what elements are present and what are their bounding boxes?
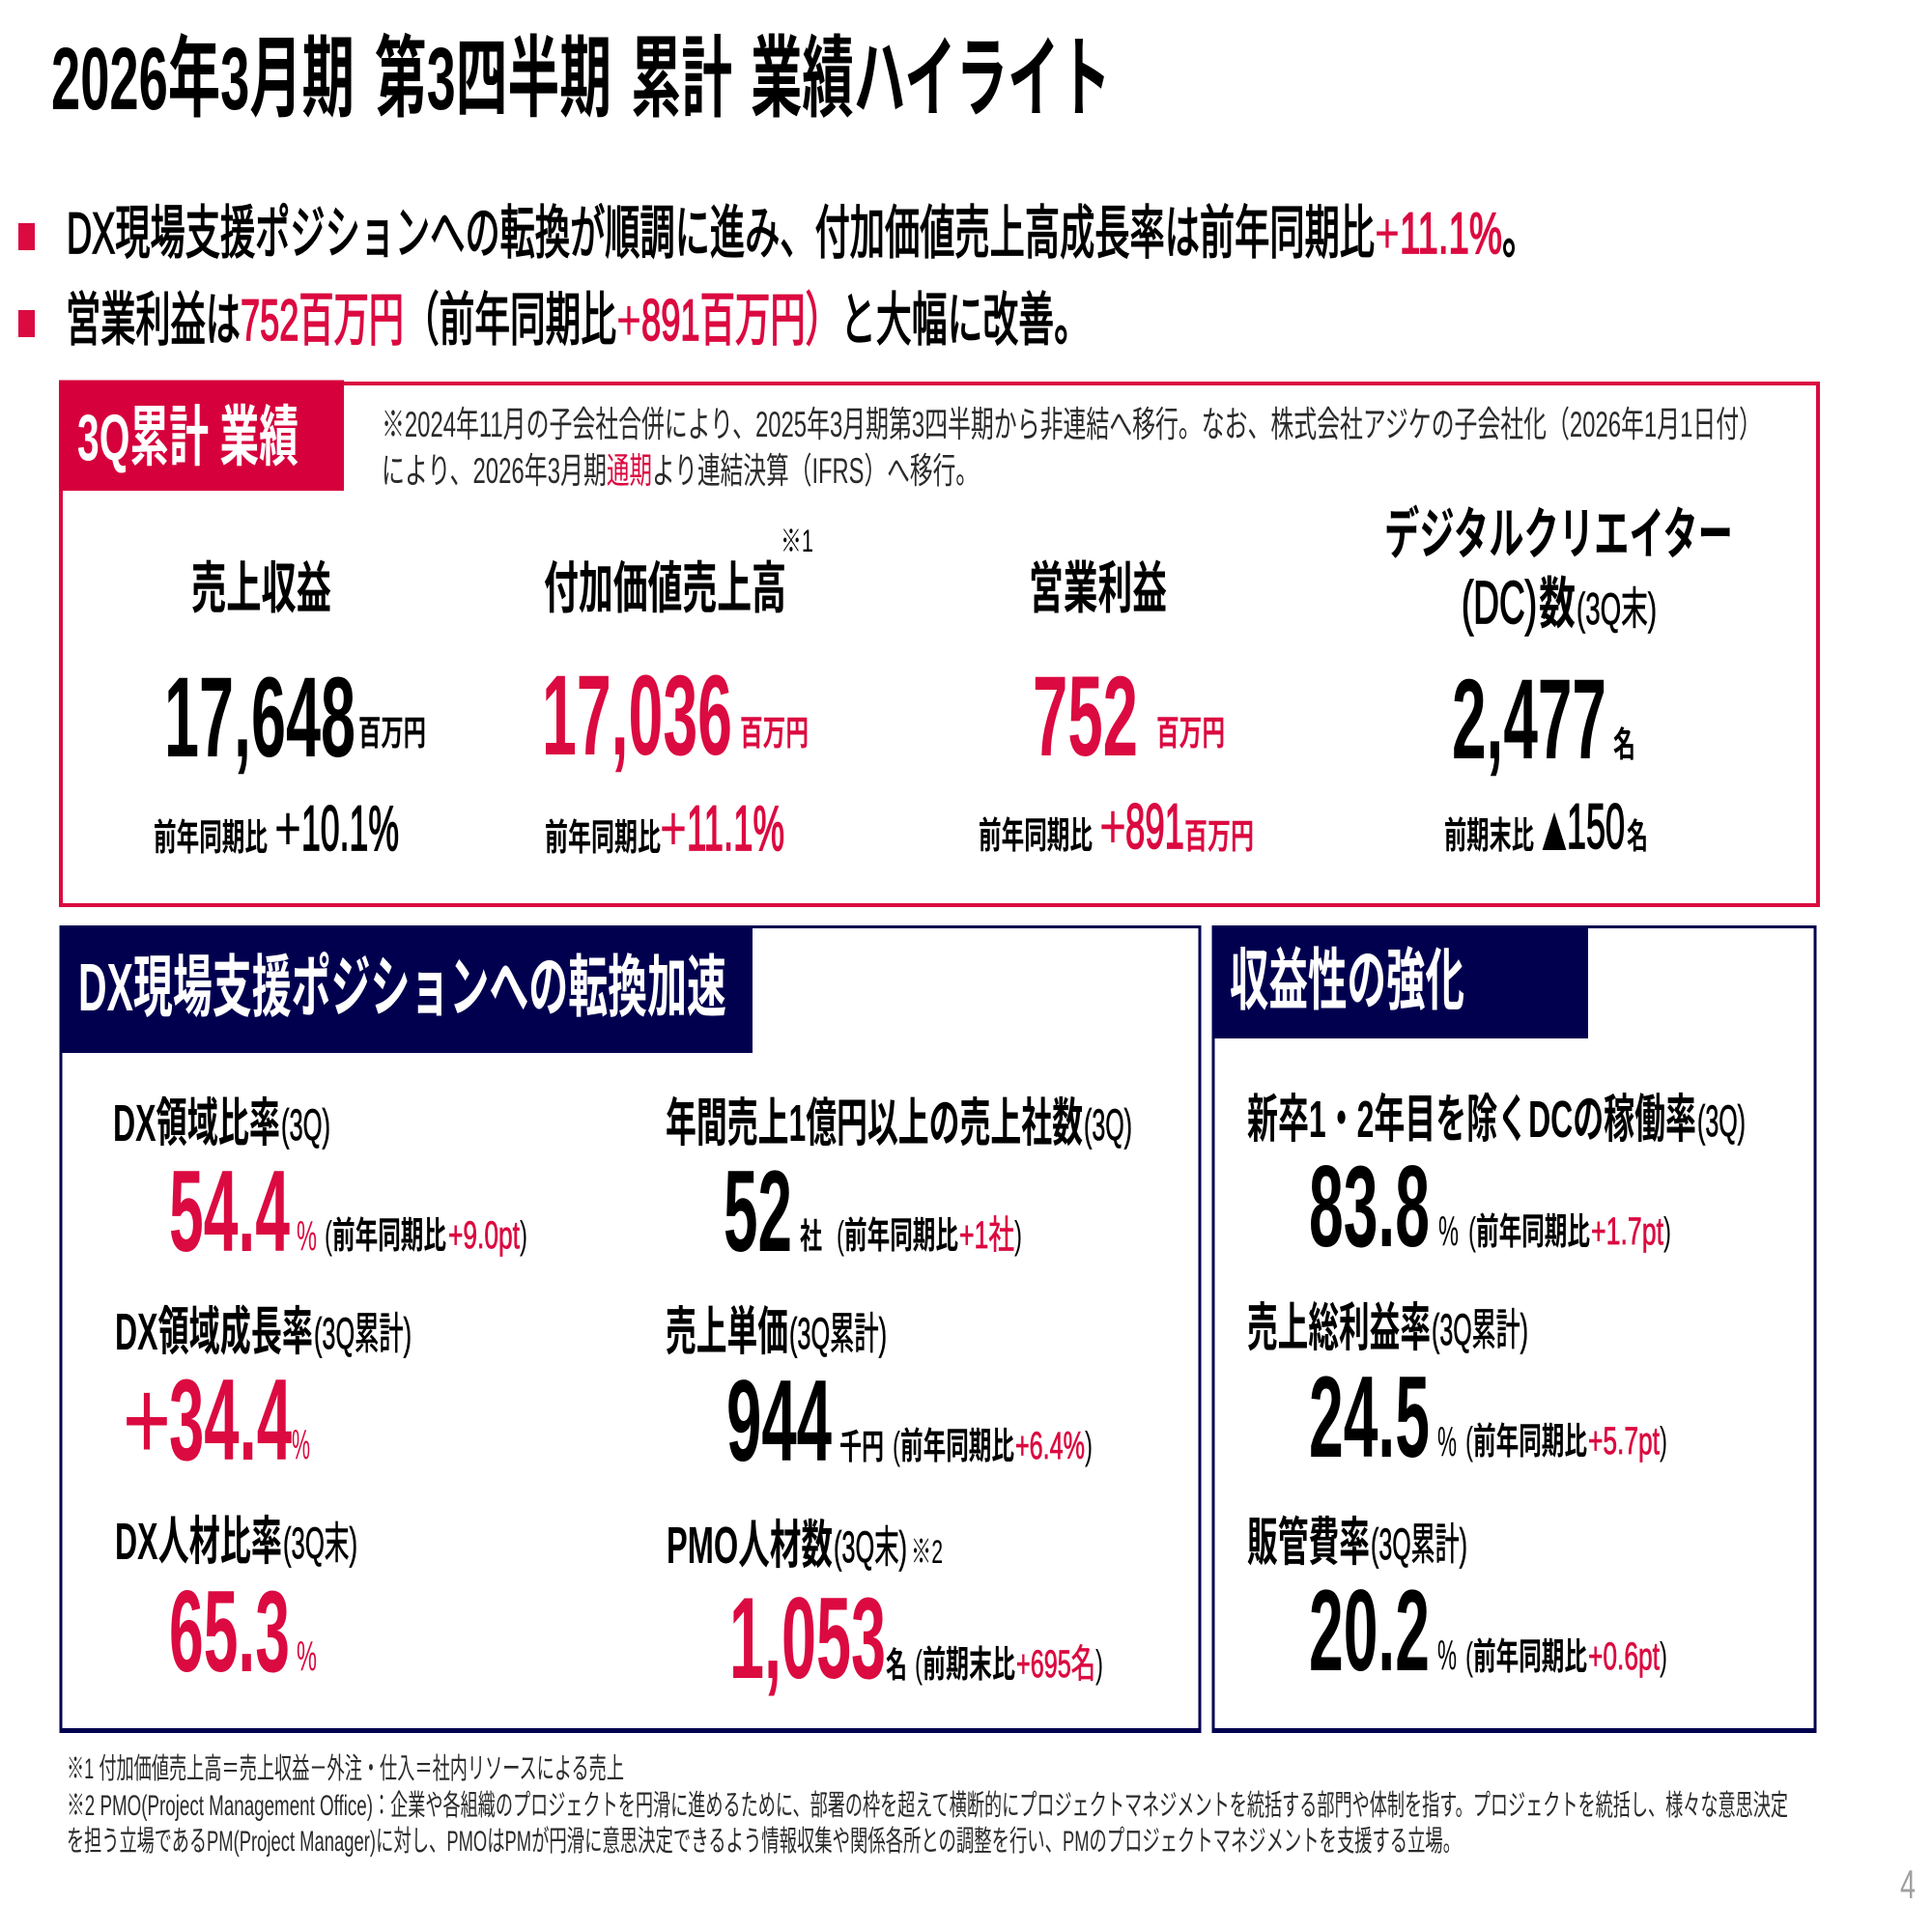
KPI: value-added revenue: ※1 bbox=[781, 524, 813, 558]
bullet marker 2 bbox=[18, 310, 35, 337]
metric: unit price: 944 bbox=[726, 1356, 832, 1486]
metric: DX area growth bbox=[115, 1303, 412, 1485]
metric: clients over 100M yen: 前年同期比 bbox=[844, 1216, 958, 1257]
bullet 2 text: 752百万円 bbox=[241, 288, 404, 353]
footnotes: ※1 付加価値売上高＝売上収益－外注・仕入＝社内リソースによる売上 bbox=[67, 1753, 624, 1785]
KPI: revenue: + bbox=[274, 792, 301, 864]
metric: unit price bbox=[666, 1303, 1093, 1486]
footnotes bbox=[67, 1753, 1788, 1858]
bullet 2 text: （前年同期比 bbox=[404, 288, 616, 353]
bullet 2 text: と大幅に改善。 bbox=[840, 288, 1090, 353]
KPI: value-added revenue bbox=[542, 524, 813, 864]
KPI: digital creators: ▲ bbox=[1534, 792, 1575, 865]
metric: gross margin: ) bbox=[1660, 1420, 1667, 1463]
metric: utilization: % bbox=[1438, 1208, 1459, 1255]
KPI: digital creators: 150 bbox=[1567, 790, 1625, 862]
metric: unit price: 売上単価 bbox=[666, 1303, 788, 1361]
metric: clients over 100M yen: 年間売上1億円以上の売上社数 bbox=[666, 1094, 1083, 1152]
panel bottom edge bbox=[60, 1728, 1202, 1733]
metric: PMO talent: PMO人材数 bbox=[667, 1517, 833, 1575]
KPI: revenue: 百万円 bbox=[358, 713, 426, 753]
KPI: operating profit: 前年同期比 bbox=[979, 816, 1093, 857]
KPI: revenue: 17,648 bbox=[164, 654, 355, 781]
metric: utilization bbox=[1247, 1091, 1746, 1271]
metric: PMO talent bbox=[667, 1517, 1103, 1703]
metric: PMO talent: 1,053 bbox=[729, 1574, 886, 1703]
metric: PMO talent: 前期末比 bbox=[923, 1645, 1015, 1686]
KPI: operating profit bbox=[979, 557, 1254, 862]
metric: utilization: 前年同期比 bbox=[1476, 1212, 1590, 1253]
metric: gross margin: +5.7pt bbox=[1588, 1420, 1660, 1463]
bullet 2 text bbox=[66, 288, 1090, 353]
panel tab bbox=[59, 381, 344, 491]
panel frame bbox=[1213, 927, 1815, 1731]
panel: DX position shift bbox=[60, 925, 1202, 1733]
footnotes: を担う立場である bbox=[67, 1826, 207, 1858]
metric: DX talent ratio: (3Q末) bbox=[283, 1519, 357, 1568]
KPI: digital creators: 前期末比 bbox=[1444, 816, 1534, 857]
KPI: operating profit: 百万円 bbox=[1184, 816, 1254, 856]
metric: utilization: +1.7pt bbox=[1591, 1210, 1663, 1253]
KPI: revenue: 10.1% bbox=[301, 792, 399, 864]
metric: DX area ratio bbox=[113, 1094, 527, 1276]
metric: gross margin: (3Q累計) bbox=[1432, 1305, 1528, 1354]
metric: DX talent ratio: DX人材比率 bbox=[115, 1513, 282, 1571]
metric: DX area ratio: 54.4 bbox=[169, 1147, 290, 1276]
metric: clients over 100M yen: ( bbox=[837, 1214, 844, 1257]
metric: gross margin: 前年同期比 bbox=[1473, 1422, 1587, 1463]
metric: SG&A ratio: ( bbox=[1465, 1635, 1473, 1678]
KPI: value-added revenue: 前年同期比 bbox=[545, 818, 661, 859]
metric: utilization: (3Q) bbox=[1697, 1096, 1746, 1146]
metric: DX talent ratio bbox=[115, 1513, 357, 1696]
metric: clients over 100M yen bbox=[666, 1094, 1132, 1276]
KPI: digital creators: 数 bbox=[1539, 573, 1576, 636]
title: 業績ハイライト bbox=[751, 30, 1111, 128]
title: 2026年3月期 bbox=[51, 30, 355, 128]
panel heading: 3Q累計 業績 bbox=[77, 401, 298, 474]
metric: DX area ratio: 前年同期比 bbox=[332, 1216, 446, 1257]
KPI: operating profit: 891 bbox=[1125, 790, 1184, 862]
footnotes: に対し、PMOはPMが円滑に意思決定できるよう情報収集や関係各所との調整を行い、 bbox=[376, 1826, 1063, 1858]
KPI: digital creators: 2,477 bbox=[1452, 656, 1606, 783]
KPI: digital creators: (3Q末) bbox=[1577, 583, 1657, 634]
KPI: value-added revenue: 17,036 bbox=[542, 652, 732, 780]
footnotes: ※2 PMO(Project Management Office) bbox=[67, 1790, 373, 1822]
metric: clients over 100M yen: (3Q) bbox=[1084, 1100, 1132, 1150]
metric: DX area ratio: DX領域比率 bbox=[113, 1094, 280, 1152]
metric: DX area growth: DX領域成長率 bbox=[115, 1303, 313, 1361]
metric: PMO talent: ※2 bbox=[911, 1534, 943, 1571]
metric: unit price: +6.4% bbox=[1015, 1425, 1085, 1467]
title bbox=[51, 30, 1111, 128]
metric: PMO talent: 名 bbox=[886, 1645, 907, 1685]
metric: SG&A ratio: 前年同期比 bbox=[1473, 1637, 1587, 1678]
panel heading: DX現場支援ポジションへの転換加速 bbox=[78, 950, 726, 1025]
KPI: digital creators: 名 bbox=[1627, 816, 1648, 856]
metric: clients over 100M yen: 52 bbox=[724, 1147, 792, 1276]
metric: gross margin: % bbox=[1437, 1418, 1457, 1465]
page number: 4 bbox=[1900, 1861, 1916, 1907]
KPI: value-added revenue: 付加価値売上高 bbox=[544, 557, 786, 620]
KPI: revenue: 売上収益 bbox=[191, 557, 331, 620]
metric: PMO talent: ) bbox=[1095, 1643, 1103, 1686]
metric: SG&A ratio: ) bbox=[1660, 1635, 1667, 1678]
panel frame bbox=[61, 384, 1818, 905]
KPI: operating profit: + bbox=[1099, 790, 1126, 862]
metric: DX area ratio: +9.0pt bbox=[448, 1214, 520, 1257]
bullet 1 text: + bbox=[1375, 201, 1400, 266]
KPI: operating profit: 営業利益 bbox=[1029, 557, 1167, 620]
metric: DX talent ratio: 65.3 bbox=[169, 1567, 290, 1696]
metric: DX talent ratio: % bbox=[297, 1633, 317, 1680]
panel tab bbox=[1211, 925, 1588, 1038]
KPI: value-added revenue: 11.1% bbox=[687, 792, 784, 864]
title: 累計 bbox=[631, 30, 732, 128]
metric: gross margin bbox=[1247, 1299, 1667, 1482]
bullet 2 text: 営業利益は bbox=[66, 288, 241, 353]
KPI: digital creators bbox=[1384, 503, 1733, 865]
panel: 3Q cumulative results bbox=[59, 381, 1818, 905]
metric: SG&A ratio: 販管費率 bbox=[1247, 1514, 1370, 1572]
consolidation note: より連結決算（IFRS）へ移行。 bbox=[652, 451, 979, 491]
panel tab bbox=[60, 925, 753, 1053]
KPI: operating profit: 752 bbox=[1033, 653, 1138, 781]
metric: utilization: ) bbox=[1663, 1210, 1671, 1253]
metric: DX area ratio: ( bbox=[325, 1214, 332, 1257]
metric: DX area growth: 34.4 bbox=[169, 1355, 292, 1485]
metric: unit price: (3Q累計) bbox=[789, 1309, 887, 1358]
KPI: digital creators: (DC) bbox=[1462, 570, 1537, 637]
metric: SG&A ratio: 20.2 bbox=[1309, 1566, 1430, 1695]
metric: DX area ratio: ) bbox=[520, 1214, 527, 1257]
metric: DX area growth: (3Q累計) bbox=[314, 1309, 412, 1358]
panel: profitability bbox=[1211, 925, 1816, 1733]
consolidation note bbox=[382, 405, 1762, 491]
metric: SG&A ratio: (3Q累計) bbox=[1371, 1520, 1467, 1569]
metric: SG&A ratio: +0.6pt bbox=[1588, 1635, 1660, 1678]
KPI: revenue bbox=[154, 557, 426, 864]
metric: utilization: 83.8 bbox=[1309, 1142, 1430, 1271]
metric: PMO talent: +695名 bbox=[1016, 1643, 1095, 1686]
metric: DX area growth: + bbox=[123, 1355, 171, 1485]
panel frame bbox=[61, 927, 1200, 1731]
title: 第3四半期 bbox=[375, 30, 611, 128]
consolidation note: 通期 bbox=[607, 451, 652, 491]
metric: clients over 100M yen: 社 bbox=[800, 1216, 822, 1256]
footnotes: PMのプロジェクトマネジメントを支援する立場。 bbox=[1063, 1826, 1461, 1858]
consolidation note: により、2026年3月期 bbox=[382, 451, 607, 491]
metric: PMO talent: (3Q末) bbox=[834, 1522, 907, 1572]
bullet 2 text: 891百万円） bbox=[641, 288, 840, 353]
KPI: digital creators: 名 bbox=[1613, 724, 1635, 764]
metric: DX area growth: % bbox=[292, 1421, 310, 1468]
footnotes: PM(Project Manager) bbox=[207, 1826, 376, 1858]
KPI: digital creators: デジタルクリエイター bbox=[1384, 503, 1733, 566]
KPI: value-added revenue: 百万円 bbox=[740, 713, 809, 753]
metric: unit price: ( bbox=[893, 1425, 900, 1467]
bullet marker 1 bbox=[18, 223, 35, 250]
metric: clients over 100M yen: ) bbox=[1014, 1214, 1022, 1257]
panel heading: 収益性の強化 bbox=[1230, 943, 1464, 1018]
metric: clients over 100M yen: +1社 bbox=[959, 1214, 1014, 1257]
bullet 1 text: 11.1% bbox=[1400, 201, 1502, 266]
summary bullets bbox=[18, 201, 1537, 353]
metric: gross margin: 24.5 bbox=[1309, 1352, 1430, 1482]
KPI: operating profit: 百万円 bbox=[1156, 713, 1225, 753]
metric: utilization: ( bbox=[1468, 1210, 1476, 1253]
metric: DX area ratio: % bbox=[297, 1212, 317, 1260]
KPI: revenue: 前年同期比 bbox=[154, 818, 268, 859]
metric: PMO talent: ( bbox=[915, 1643, 923, 1686]
metric: SG&A ratio bbox=[1247, 1514, 1667, 1695]
metric: DX area ratio: (3Q) bbox=[281, 1100, 330, 1150]
panel bottom edge bbox=[1211, 1728, 1816, 1733]
metric: gross margin: ( bbox=[1465, 1420, 1473, 1463]
metric: unit price: 千円 bbox=[839, 1427, 884, 1466]
bullet 2 text: + bbox=[616, 288, 641, 353]
metric: SG&A ratio: % bbox=[1437, 1632, 1457, 1679]
metric: gross margin: 売上総利益率 bbox=[1247, 1299, 1431, 1357]
KPI: value-added revenue: + bbox=[660, 792, 687, 864]
metric: unit price: 前年同期比 bbox=[900, 1427, 1014, 1467]
metric: unit price: ) bbox=[1085, 1425, 1093, 1467]
bullet 1 text: 。 bbox=[1502, 201, 1537, 266]
